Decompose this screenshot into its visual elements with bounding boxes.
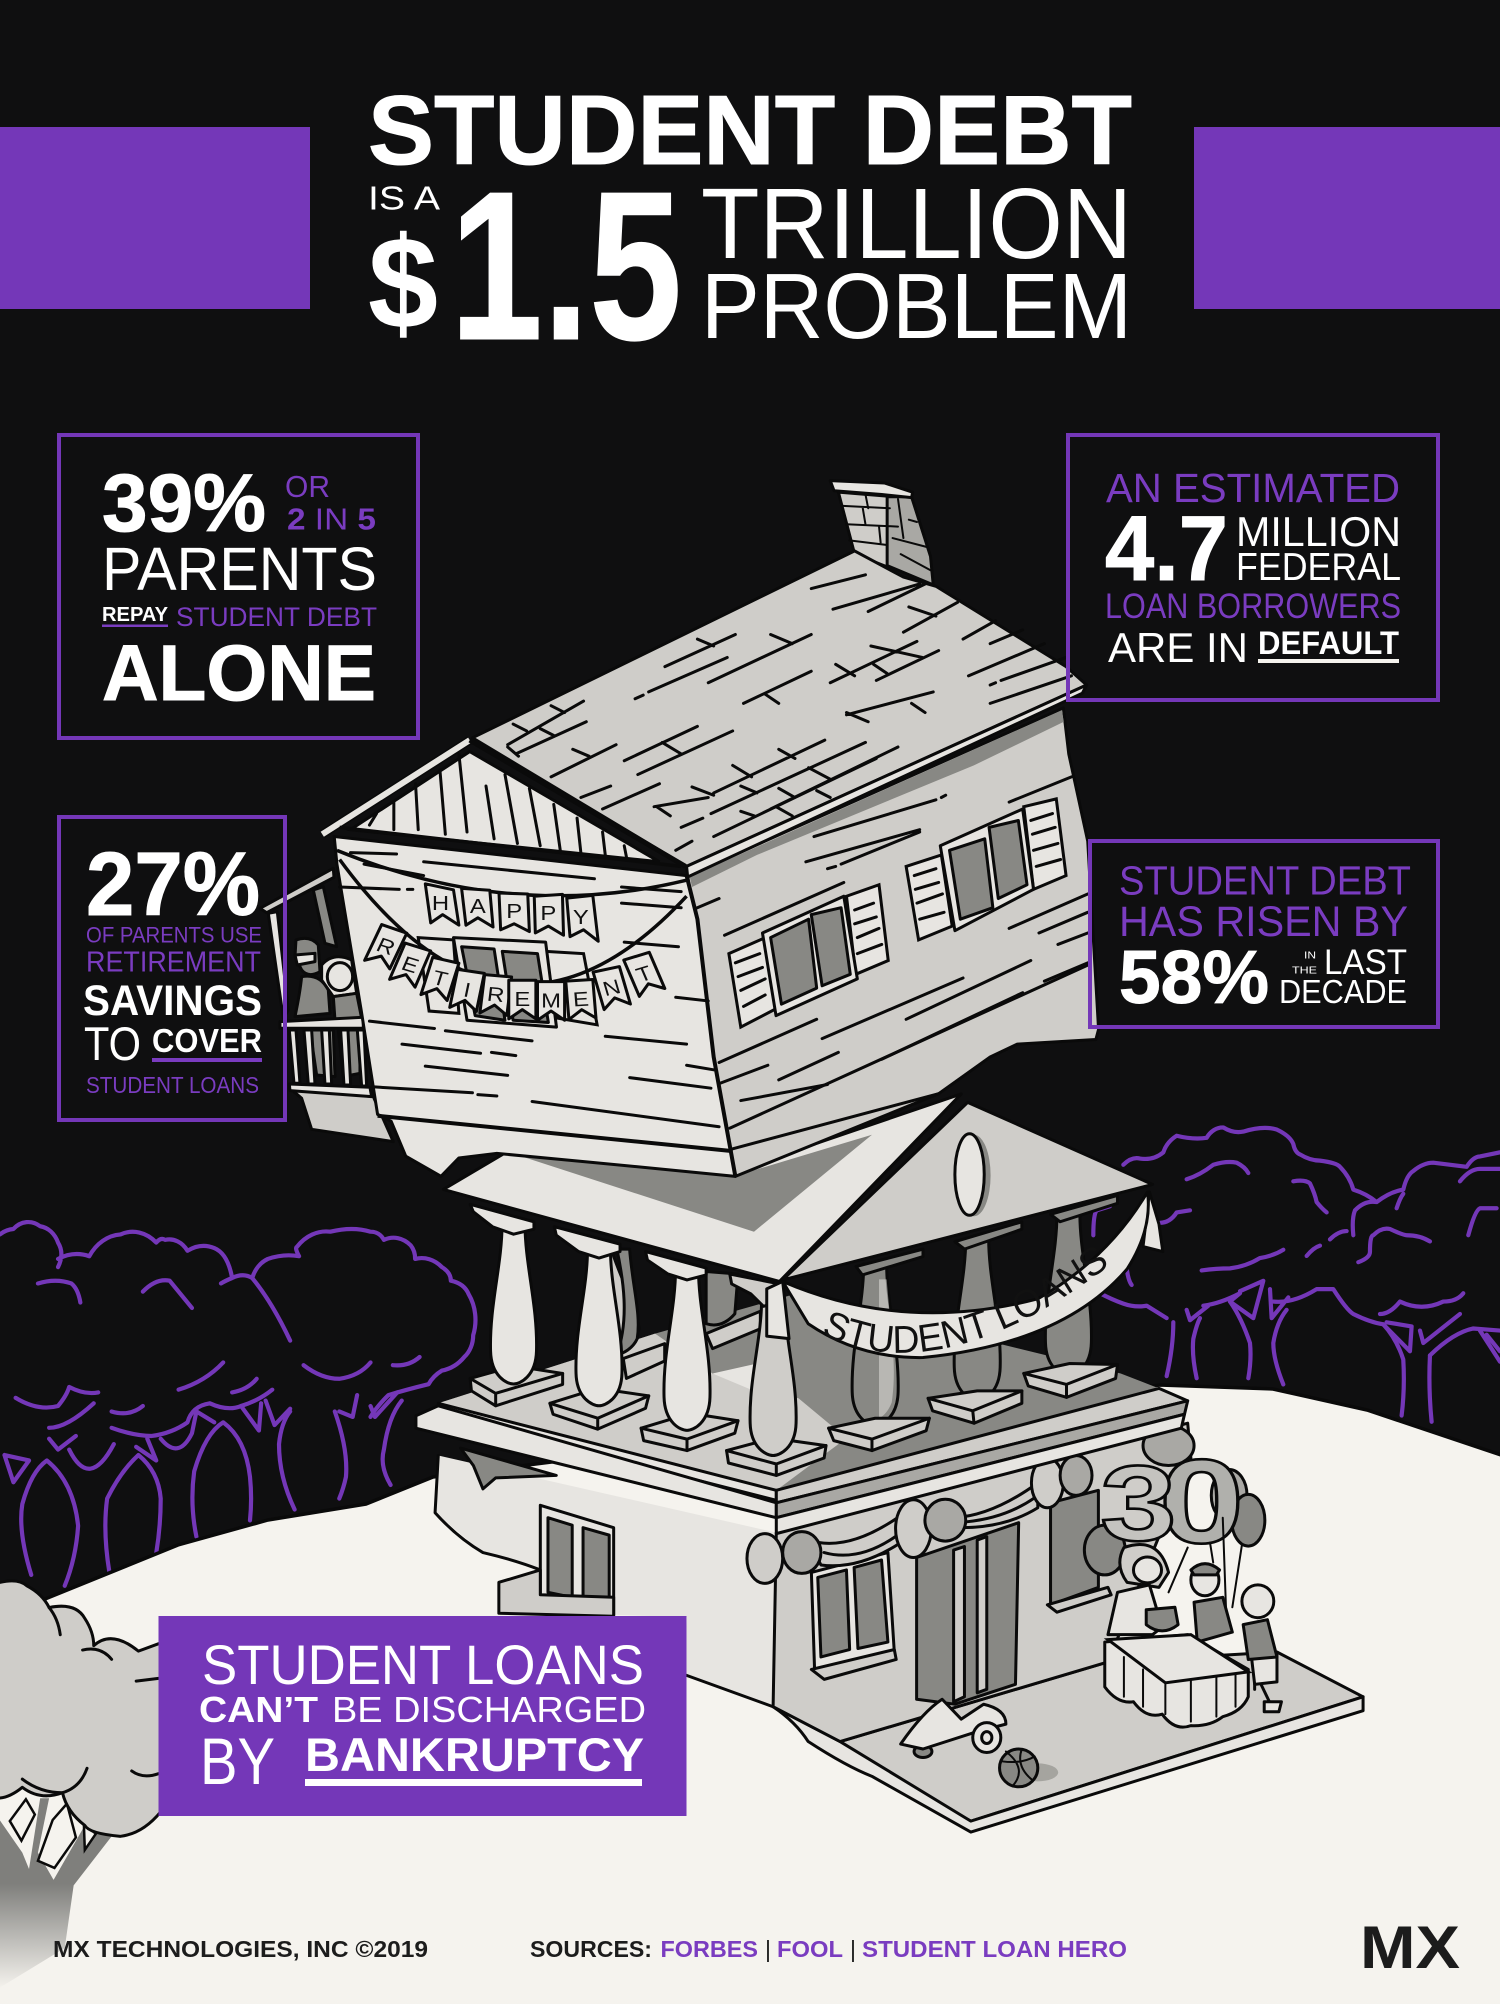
happy flags: P: [506, 900, 522, 922]
footer sources: FORBES: [660, 1936, 758, 1962]
stat box: 4.7 million borrowers: DEFAULT: [1258, 625, 1399, 661]
title: IS A: [368, 180, 440, 216]
ceiling: [443, 1094, 961, 1281]
far window: [1051, 1490, 1098, 1605]
toy car: [901, 1699, 1006, 1757]
retirement flags: E: [514, 988, 530, 1011]
stat box: 27 percent retirement savings: STUDENT LOANS: [86, 1072, 259, 1098]
porch of the house: [260, 868, 393, 1142]
stat box: 4.7 million borrowers: AN ESTIMATED: [1106, 465, 1400, 511]
purple bar right: [1194, 127, 1500, 309]
decorative balloons: [747, 1426, 1194, 1583]
child: [1242, 1585, 1281, 1712]
floor and slab: [438, 1294, 1159, 1490]
happy flags: A: [470, 895, 486, 918]
birthday balloons 30: 0: [1159, 1436, 1244, 1569]
foliage details: [22, 1608, 158, 1793]
stat box: 27 percent retirement savings: [59, 817, 285, 1120]
purple trees right: [1093, 1127, 1500, 1422]
right wall siding: [692, 777, 1088, 1101]
footer sources: STUDENT LOAN HERO: [862, 1936, 1127, 1962]
retirement flags: N: [600, 975, 623, 1001]
legs: [310, 1030, 360, 1077]
bankruptcy callout: BANKRUPTCY: [305, 1728, 644, 1781]
retirement flags: I: [462, 978, 473, 1002]
deck edge: [773, 1697, 1363, 1832]
happy flags: [425, 884, 598, 941]
rear columns: [598, 1247, 760, 1378]
window sill: [811, 1650, 896, 1679]
bankruptcy callout: [158, 1616, 686, 1816]
stat box: 27 percent retirement savings: COVER: [152, 1022, 262, 1059]
happy flags: P: [540, 902, 556, 925]
man on porch: [295, 938, 330, 1017]
stat box: 58 percent rise: IN: [1304, 950, 1316, 962]
birthday balloons 30: 3: [1100, 1444, 1177, 1564]
stat box: 58 percent rise: [1090, 841, 1438, 1027]
footer sources: |: [850, 1936, 856, 1962]
front columns: [470, 1204, 826, 1475]
stat box: 4.7 million borrowers: [1068, 435, 1438, 700]
upper house: [322, 481, 1099, 1176]
title: [368, 75, 1132, 384]
retirement flags: M: [541, 989, 561, 1012]
birthday balloons 30: [1084, 1436, 1265, 1607]
stat box: 58 percent rise: LAST: [1324, 943, 1407, 982]
front porch deck: [840, 1652, 1363, 1821]
stat box: 39 percent of parents: ALONE: [102, 628, 376, 717]
title: TRILLION: [701, 168, 1132, 280]
stat box: 27 percent retirement savings: TO: [84, 1017, 141, 1070]
lower storey: [376, 1054, 1365, 1834]
purple bar left: [0, 127, 310, 309]
happy flags: H: [432, 892, 449, 915]
right wall: [688, 708, 1099, 1176]
stat box: 58 percent rise: STUDENT DEBT: [1119, 858, 1411, 904]
door: [917, 1523, 1019, 1704]
woman on porch: [322, 957, 362, 1020]
man: [1191, 1564, 1232, 1642]
gable fascia right: [470, 740, 685, 866]
stat box: 39 percent of parents: 2 IN 5: [287, 502, 376, 537]
bankruptcy callout: BY: [200, 1724, 275, 1798]
stat box: 4.7 million borrowers: ARE IN: [1108, 624, 1248, 671]
basketball: [1000, 1749, 1058, 1787]
retirement flags: E: [398, 952, 422, 978]
student loans banner: [765, 1196, 1161, 1360]
stat box: 4.7 million borrowers: FEDERAL: [1236, 546, 1401, 589]
porch floor: [289, 1084, 372, 1097]
ground hill: [0, 1385, 1500, 2004]
stat box: 58 percent rise: THE: [1292, 965, 1317, 976]
left wall: [435, 1456, 776, 1707]
right colonnade: [829, 1195, 1118, 1451]
front wall beam: [340, 827, 681, 866]
retirement flags: R: [373, 933, 399, 960]
stat box: 27 percent retirement savings: 27%: [86, 835, 260, 935]
tree branch gaps: [10, 1799, 96, 1868]
stat box: 39 percent of parents: [59, 435, 418, 738]
title: $: [368, 209, 438, 356]
window right 1: [729, 885, 888, 1027]
eave: [687, 685, 1087, 877]
stat box: 39 percent of parents: PARENTS: [102, 535, 377, 603]
title: 1.5: [450, 147, 682, 384]
stat box: 58 percent rise: HAS RISEN BY: [1119, 898, 1408, 946]
woman: [1108, 1544, 1169, 1635]
front wall base line: [378, 1116, 733, 1151]
porch beam: [260, 868, 334, 913]
stat box: 39 percent of parents: REPAY: [102, 604, 169, 626]
stat box: 4.7 million borrowers: 4.7: [1105, 498, 1228, 600]
stat box: 4.7 million borrowers: LOAN BORROWERS: [1105, 587, 1401, 626]
stat box: 39 percent of parents: STUDENT DEBT: [176, 602, 377, 632]
gray tree bottom left: [0, 1581, 161, 1989]
gable fascia left: [322, 740, 470, 834]
student loans banner: STUDENT LOANS: [824, 1254, 1106, 1353]
railing balusters: [289, 1030, 367, 1086]
stat box: 39 percent of parents: 39%: [102, 458, 266, 549]
footer copyright: MX TECHNOLOGIES, INC ©2019: [53, 1936, 428, 1962]
cake: [1146, 1607, 1178, 1631]
bankruptcy callout: BE DISCHARGED: [332, 1689, 646, 1730]
draped garlands: [808, 1518, 910, 1566]
purple trees left: [0, 1222, 475, 1586]
stat box: 27 percent retirement savings: OF PARENTS USE: [86, 923, 262, 948]
tree trunk: [0, 1798, 112, 1989]
house corner: [687, 876, 735, 1176]
front window: [418, 938, 597, 1027]
pediment oval: [955, 1134, 991, 1216]
window right 2: [906, 799, 1066, 940]
MX logo: MX: [1360, 1914, 1460, 1981]
retirement flags: [365, 925, 665, 1020]
porch rail: [280, 1017, 363, 1028]
gable boards: [369, 754, 627, 860]
retirement flags: R: [486, 982, 506, 1007]
roof: [472, 551, 1087, 866]
footer sources: FOOL: [777, 1936, 843, 1962]
footer sources: SOURCES:: [530, 1936, 652, 1962]
stat box: 39 percent of parents: OR: [285, 469, 330, 504]
title: STUDENT DEBT: [368, 75, 1132, 185]
retirement flags: E: [572, 987, 590, 1011]
roof shingle lines: [508, 575, 1071, 850]
title: PROBLEM: [701, 254, 1132, 358]
left balcony door: [540, 1505, 614, 1615]
right wall: [773, 1423, 1191, 1742]
happy flags: Y: [573, 906, 589, 928]
ceiling shadow: [508, 1135, 872, 1232]
footer sources: |: [765, 1936, 771, 1962]
porch post rear: [313, 887, 337, 947]
stat box: 4.7 million borrowers: MILLION: [1236, 508, 1401, 555]
front wall siding: [340, 853, 719, 1127]
garland strings: [337, 850, 687, 984]
right wall window: [811, 1553, 894, 1669]
bankruptcy callout: CAN’T: [199, 1689, 318, 1730]
stat box: 27 percent retirement savings: SAVINGS: [83, 977, 262, 1025]
eave shadow: [690, 710, 1064, 887]
retirement flags: T: [430, 966, 451, 991]
bankruptcy callout: STUDENT LOANS: [202, 1633, 644, 1696]
right wall base: [730, 965, 1088, 1149]
front wall: [334, 837, 735, 1176]
porch post: [268, 912, 288, 1018]
party family: [1105, 1544, 1281, 1727]
footer sources: [530, 1936, 1127, 1962]
stat box: 58 percent rise: 58%: [1119, 935, 1269, 1019]
wall torn patch: [461, 1448, 556, 1489]
retirement flags: T: [633, 961, 656, 987]
porch underside: [290, 1088, 393, 1142]
balcony: [499, 1570, 614, 1616]
chimney: [830, 481, 933, 585]
stat box: 58 percent rise: DECADE: [1279, 973, 1407, 1010]
tree foliage: [0, 1581, 161, 1836]
gable: [350, 752, 659, 862]
stat box: 27 percent retirement savings: RETIREMENT: [86, 947, 261, 979]
table: [1105, 1635, 1248, 1727]
pediment: [783, 1102, 1153, 1280]
